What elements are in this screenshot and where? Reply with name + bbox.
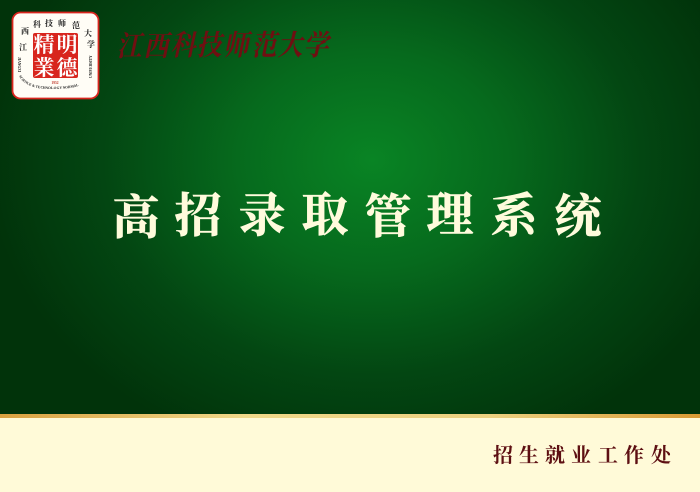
university name calligraphy: 科 bbox=[169, 30, 202, 61]
footer department name: 工 bbox=[598, 445, 618, 467]
logo ring text: chinese name: 科 bbox=[33, 19, 41, 29]
logo seal: 明 bbox=[56, 33, 78, 57]
logo ring text: english name: UNIVERSITY bbox=[89, 55, 93, 78]
footer department name: 生 bbox=[519, 444, 539, 467]
footer department name: 招 bbox=[493, 444, 513, 467]
cream footer panel bbox=[0, 418, 700, 492]
title: 理 bbox=[426, 190, 474, 242]
title: 取 bbox=[302, 190, 348, 242]
logo ring text: chinese name: 学 bbox=[87, 39, 95, 49]
logo ring text: english name: JIANGXI bbox=[17, 57, 21, 73]
logo ring text: chinese name: 技 bbox=[45, 18, 53, 28]
logo seal bbox=[33, 33, 80, 80]
title: 招 bbox=[174, 191, 222, 243]
logo ring text: english name: SCIENCE & TECHNOLOGY NORMAL bbox=[19, 75, 78, 89]
logo ring text: chinese name bbox=[19, 18, 95, 52]
logo seal: 業 bbox=[34, 56, 54, 80]
university logo bbox=[12, 12, 100, 100]
logo ring text: chinese name: 江 bbox=[19, 42, 27, 52]
university name calligraphy bbox=[115, 30, 334, 62]
university name calligraphy: 江 bbox=[115, 31, 147, 62]
footer department name: 处 bbox=[651, 444, 672, 467]
title: 统 bbox=[554, 192, 604, 244]
title: 管 bbox=[364, 192, 412, 244]
footer department name bbox=[493, 444, 672, 467]
logo ring text: chinese name: 范 bbox=[72, 20, 80, 30]
university name calligraphy: 师 bbox=[222, 30, 254, 61]
logo ring text: english name bbox=[17, 55, 93, 89]
title: 系 bbox=[490, 191, 538, 243]
university name calligraphy: 西 bbox=[142, 31, 174, 62]
logo seal: 德 bbox=[56, 56, 80, 80]
university name calligraphy: 技 bbox=[195, 30, 228, 61]
title: 高 bbox=[112, 193, 160, 245]
logo ring text: english name: 1952 bbox=[51, 81, 59, 85]
footer department name: 业 bbox=[571, 444, 591, 467]
university name calligraphy: 学 bbox=[302, 30, 334, 61]
university name calligraphy: 范 bbox=[250, 30, 282, 61]
logo ring text: chinese name: 师 bbox=[58, 18, 66, 28]
logo seal: 精 bbox=[34, 33, 54, 57]
footer department name: 作 bbox=[624, 444, 644, 467]
logo ring text: chinese name: 西 bbox=[21, 26, 29, 36]
logo ring text: chinese name: 大 bbox=[84, 28, 92, 38]
title bbox=[112, 190, 604, 245]
gold divider band bbox=[0, 414, 700, 418]
title: 录 bbox=[238, 191, 286, 243]
footer department name: 就 bbox=[545, 444, 565, 467]
university name calligraphy: 大 bbox=[276, 30, 308, 61]
